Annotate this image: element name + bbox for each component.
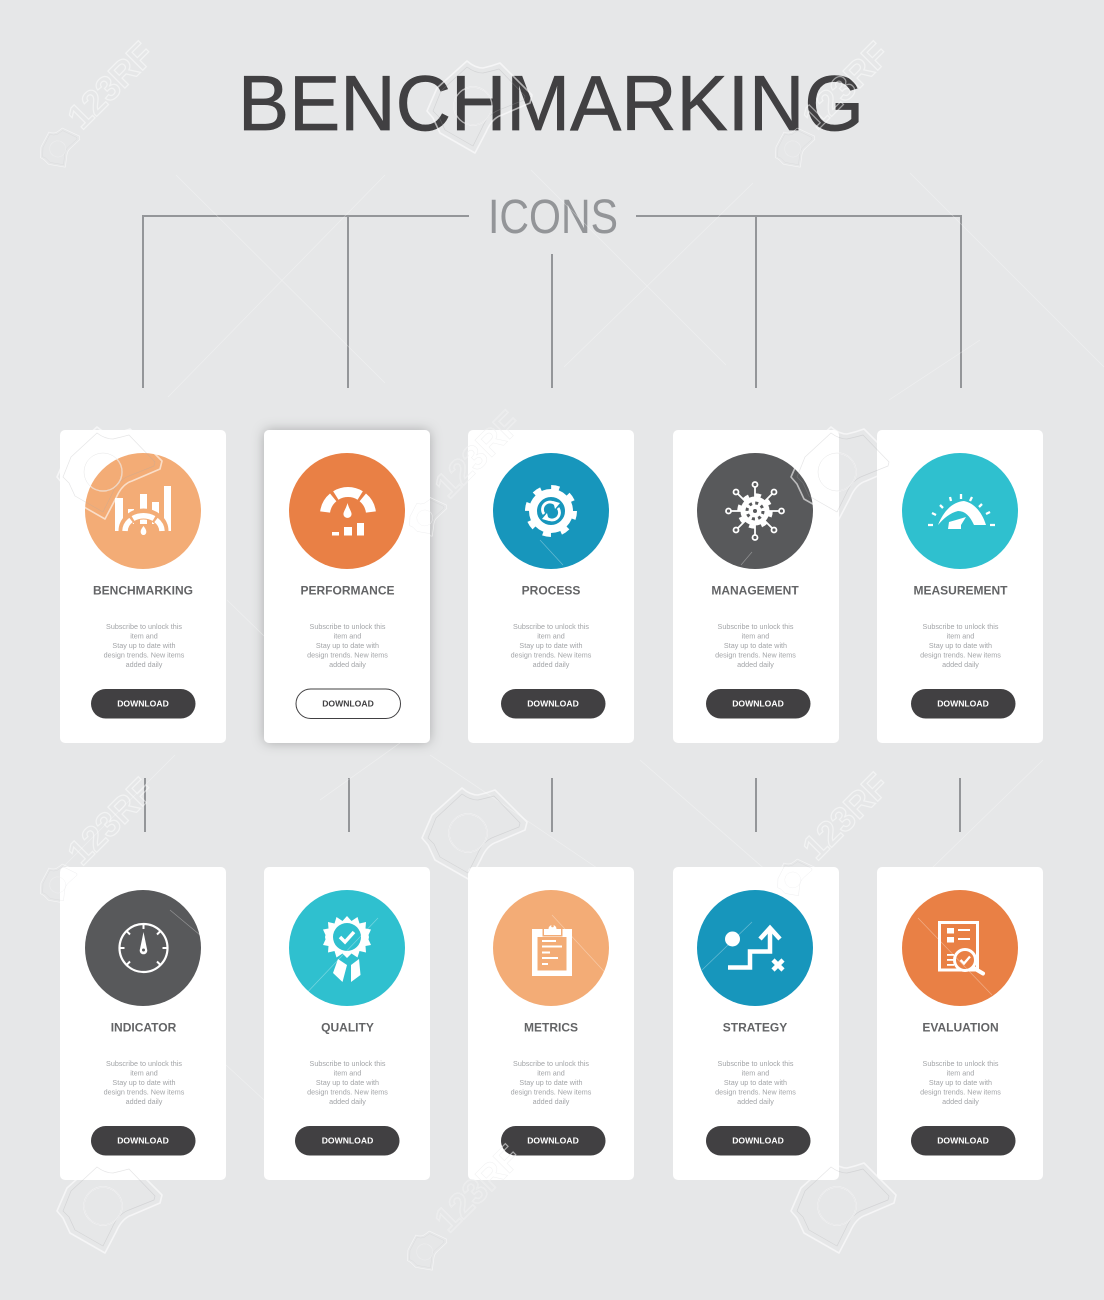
- button: DOWNLOAD: [527, 698, 579, 708]
- description: design trends. New items: [511, 1088, 592, 1096]
- description: Stay up to date with: [316, 641, 379, 650]
- label: METRICS: [524, 1020, 578, 1034]
- button: [296, 689, 400, 718]
- panel: evaluation: [877, 867, 1043, 1180]
- button: DOWNLOAD: [322, 698, 374, 708]
- label: QUALITY: [321, 1020, 374, 1034]
- button: DOWNLOAD: [117, 1136, 169, 1146]
- description: design trends. New items: [104, 1088, 185, 1096]
- button: DOWNLOAD: [937, 698, 989, 708]
- description: item and: [947, 1068, 974, 1078]
- connector lines: top: [143, 216, 961, 388]
- description: added daily: [126, 1097, 163, 1106]
- button: [911, 689, 1016, 718]
- icon: quality: [289, 890, 405, 1006]
- panel: management: [673, 430, 839, 743]
- description: Subscribe to unlock this: [718, 1059, 794, 1068]
- panel: performance: [264, 430, 430, 743]
- description: design trends. New items: [715, 1088, 796, 1096]
- description: design trends. New items: [307, 650, 388, 660]
- watermark: text: 123RF: [427, 404, 529, 506]
- description: item and: [334, 1068, 361, 1078]
- button: [91, 1126, 196, 1156]
- panel: measurement: [877, 430, 1043, 743]
- label: INDICATOR: [111, 1020, 177, 1034]
- description: Subscribe to unlock this: [513, 1059, 589, 1068]
- label: STRATEGY: [723, 1020, 787, 1034]
- panel: quality: [264, 867, 430, 1180]
- label: MEASUREMENT: [913, 584, 1008, 598]
- watermark: text: 123RF: [427, 1138, 529, 1240]
- button: DOWNLOAD: [322, 1136, 373, 1146]
- icon: benchmarking: [85, 453, 201, 569]
- button: DOWNLOAD: [732, 698, 784, 708]
- panel: indicator: [60, 867, 226, 1180]
- description: item and: [742, 1068, 769, 1078]
- subtitle: icons: ICONS: [488, 191, 618, 244]
- watermark: text: 123RF: [795, 766, 897, 868]
- icon: evaluation: [902, 890, 1018, 1006]
- description: added daily: [329, 660, 366, 669]
- button: DOWNLOAD: [937, 1136, 989, 1146]
- button: DOWNLOAD: [117, 698, 169, 708]
- title: BENCHMARKING: [238, 59, 864, 147]
- icon: process: [493, 453, 609, 569]
- watermark: text: 123RF: [60, 771, 162, 873]
- description: Subscribe to unlock this: [923, 1059, 999, 1068]
- description: added daily: [533, 660, 570, 669]
- icon: measurement: [902, 453, 1018, 569]
- icon: indicator: [85, 890, 201, 1006]
- description: design trends. New items: [307, 1088, 388, 1096]
- description: added daily: [942, 660, 979, 669]
- description: item and: [947, 632, 974, 640]
- description: item and: [334, 632, 361, 640]
- description: Subscribe to unlock this: [106, 1059, 182, 1068]
- description: added daily: [533, 1097, 570, 1106]
- watermark: stamps: [33, 61, 896, 1277]
- description: Subscribe to unlock this: [106, 622, 182, 631]
- description: design trends. New items: [715, 650, 796, 660]
- panel: strategy: [673, 867, 839, 1180]
- description: Subscribe to unlock this: [310, 622, 386, 631]
- icon: management: [697, 453, 813, 569]
- description: Stay up to date with: [519, 1078, 583, 1087]
- description: Subscribe to unlock this: [310, 1059, 386, 1068]
- description: design trends. New items: [920, 650, 1001, 660]
- description: item and: [130, 632, 158, 640]
- description: Subscribe to unlock this: [718, 622, 794, 631]
- description: item and: [537, 1068, 565, 1078]
- icon: performance: [289, 453, 405, 569]
- watermark: text: 123RF: [795, 35, 897, 137]
- description: Stay up to date with: [929, 641, 992, 650]
- panel: metrics: [468, 867, 634, 1180]
- button: [706, 689, 810, 718]
- description: added daily: [126, 660, 163, 669]
- button: DOWNLOAD: [732, 1136, 784, 1146]
- description: Stay up to date with: [112, 1078, 176, 1087]
- icon: strategy: [697, 890, 813, 1006]
- label: EVALUATION: [922, 1020, 999, 1034]
- description: Stay up to date with: [724, 641, 787, 650]
- label: BENCHMARKING: [93, 584, 193, 598]
- label: PROCESS: [522, 584, 580, 598]
- button: [911, 1126, 1016, 1156]
- watermark: text: 123RF: [427, 404, 529, 506]
- description: design trends. New items: [920, 1088, 1001, 1096]
- connector lines: middle: [145, 778, 960, 832]
- description: added daily: [737, 1097, 774, 1106]
- description: item and: [537, 632, 565, 640]
- description: Subscribe to unlock this: [513, 622, 589, 631]
- description: item and: [742, 632, 769, 640]
- panel: benchmarking: [60, 430, 226, 743]
- button: DOWNLOAD: [527, 1136, 579, 1146]
- label: PERFORMANCE: [300, 584, 395, 598]
- watermark: text: 123RF: [60, 35, 162, 137]
- description: design trends. New items: [104, 650, 185, 660]
- description: added daily: [942, 1097, 979, 1106]
- description: Subscribe to unlock this: [923, 622, 999, 631]
- label: MANAGEMENT: [711, 584, 799, 598]
- description: Stay up to date with: [724, 1078, 787, 1087]
- description: added daily: [737, 660, 774, 669]
- button: [706, 1126, 810, 1156]
- watermark: text: [60, 35, 897, 1240]
- description: Stay up to date with: [112, 641, 176, 650]
- description: added daily: [329, 1097, 366, 1106]
- description: item and: [130, 1068, 158, 1078]
- button: [501, 689, 606, 718]
- button: [295, 1126, 400, 1156]
- description: Stay up to date with: [316, 1078, 379, 1087]
- description: Stay up to date with: [519, 641, 583, 650]
- panel: process: [468, 430, 634, 743]
- icon: metrics: [493, 890, 609, 1006]
- watermark: text: 123RF: [427, 1138, 529, 1240]
- button: [91, 689, 196, 718]
- button: [501, 1126, 606, 1156]
- description: Stay up to date with: [929, 1078, 992, 1087]
- description: design trends. New items: [511, 650, 592, 660]
